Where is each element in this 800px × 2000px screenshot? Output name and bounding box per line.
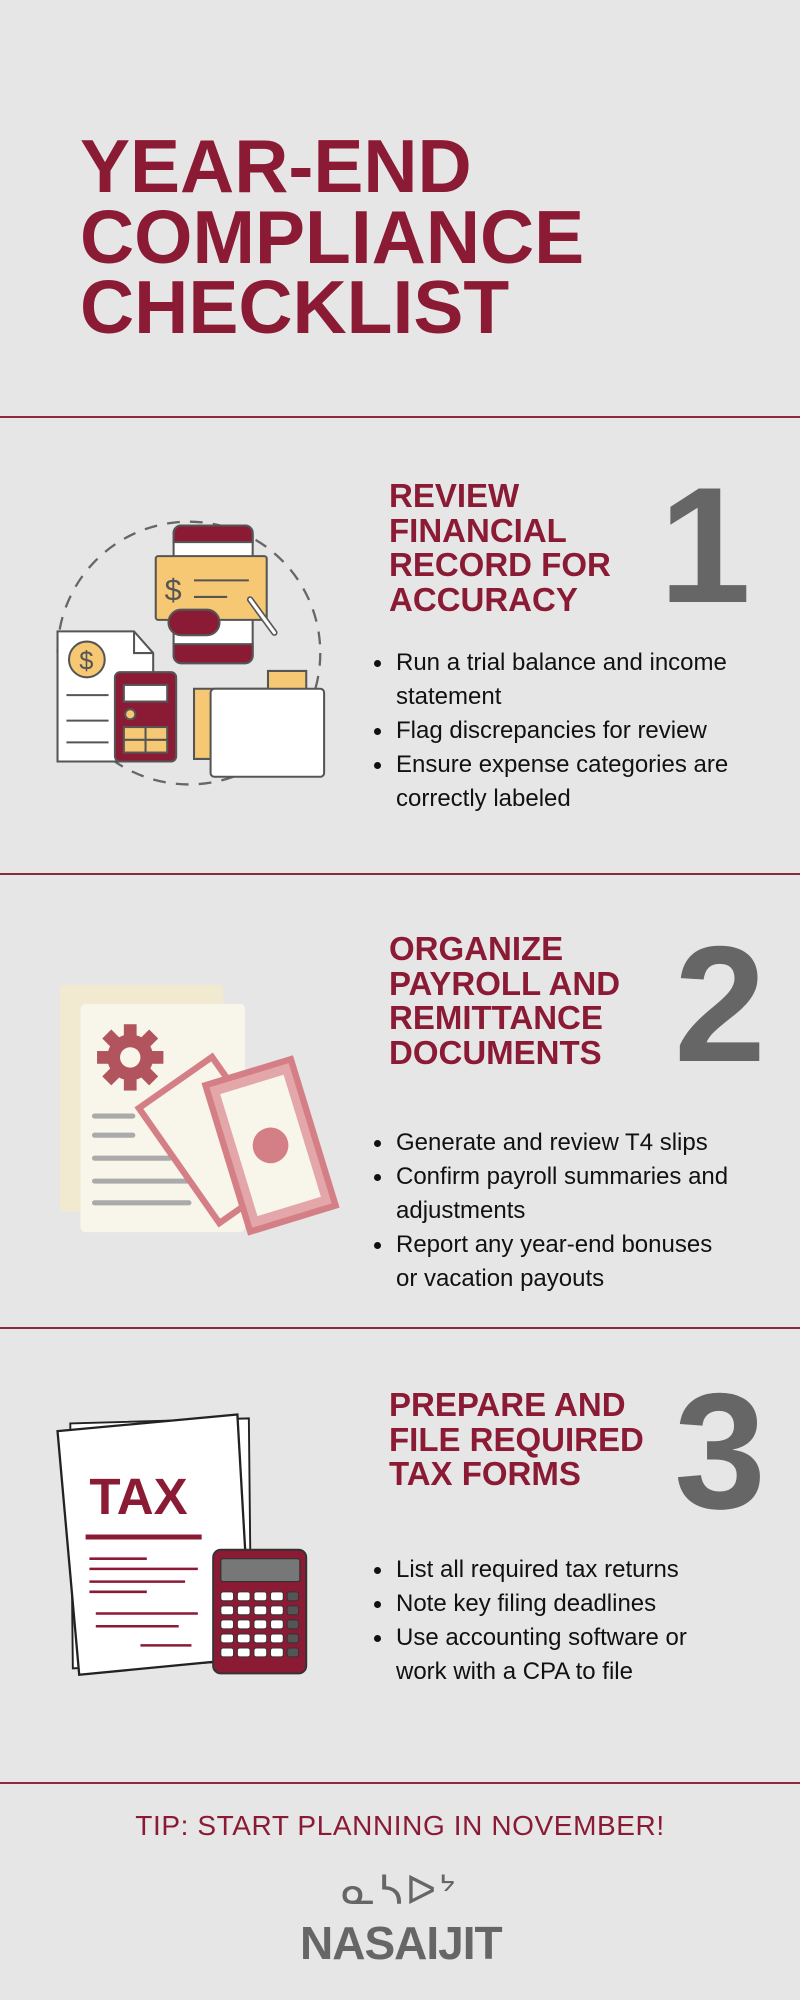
bullets: step 3: List all required tax returns bbox=[396, 1556, 679, 1583]
bullets: step 2: Confirm payroll summaries and bbox=[396, 1163, 728, 1190]
bullets: step 1: Flag discrepancies for review bbox=[396, 717, 707, 744]
logo: Nasaujit: ᓇᓴᐅᔾ bbox=[341, 1868, 459, 1914]
icon: financial records: $ bbox=[79, 648, 93, 676]
heading: step 1: RECORD FOR bbox=[389, 546, 611, 583]
heading: step 2: REMITTANCE bbox=[389, 999, 603, 1036]
title bbox=[80, 124, 584, 349]
bullets: step 1: Ensure expense categories are bbox=[396, 751, 728, 778]
heading: step 3 bbox=[389, 1386, 644, 1492]
title: CHECKLIST bbox=[80, 265, 509, 349]
bullets: step 3: work with a CPA to file bbox=[396, 1658, 633, 1685]
logo: Nasaujit: NASAIJIT bbox=[300, 1917, 502, 1969]
logo: Nasaujit bbox=[300, 1868, 502, 1969]
heading: step 1: REVIEW bbox=[389, 477, 519, 514]
bullets: step 1 bbox=[374, 649, 728, 812]
title: YEAR-END bbox=[80, 124, 472, 208]
bullets: step 2: or vacation payouts bbox=[396, 1265, 604, 1292]
bullets: step 1: correctly labeled bbox=[396, 785, 571, 812]
bullets: step 2: Generate and review T4 slips bbox=[396, 1129, 708, 1156]
tip text: TIP: START PLANNING IN NOVEMBER! bbox=[135, 1810, 665, 1841]
bullets: step 1: Run a trial balance and income bbox=[396, 649, 727, 676]
heading: step 2: ORGANIZE bbox=[389, 930, 563, 967]
icon: financial records bbox=[58, 522, 324, 784]
heading: step 1: FINANCIAL bbox=[389, 512, 567, 548]
icon: tax forms bbox=[58, 1415, 306, 1675]
heading: step 1: ACCURACY bbox=[389, 580, 578, 618]
bullets: step 3 bbox=[374, 1556, 687, 1685]
heading: step 2: PAYROLL AND bbox=[389, 964, 620, 1002]
heading: step 3: PREPARE AND bbox=[389, 1386, 626, 1423]
icon: payroll documents bbox=[60, 985, 336, 1232]
bullets: step 2 bbox=[374, 1129, 728, 1292]
bullets: step 3: Use accounting software or bbox=[396, 1624, 687, 1651]
heading: step 2 bbox=[389, 930, 620, 1070]
number 1: 1 bbox=[659, 453, 751, 637]
heading: step 2: DOCUMENTS bbox=[389, 1034, 602, 1070]
bullets: step 2: Report any year-end bonuses bbox=[396, 1231, 712, 1258]
number 3: 3 bbox=[674, 1359, 766, 1543]
number 2: 2 bbox=[674, 912, 766, 1096]
heading: step 1 bbox=[389, 477, 611, 618]
bullets: step 2: adjustments bbox=[396, 1197, 525, 1224]
icon: financial records: $ bbox=[165, 574, 182, 608]
icon: tax forms: TAX bbox=[89, 1468, 188, 1525]
bullets: step 3: Note key filing deadlines bbox=[396, 1590, 656, 1617]
title: COMPLIANCE bbox=[80, 194, 584, 278]
bullets: step 1: statement bbox=[396, 683, 501, 710]
heading: step 3: FILE REQUIRED bbox=[389, 1420, 644, 1458]
heading: step 3: TAX FORMS bbox=[389, 1455, 581, 1492]
